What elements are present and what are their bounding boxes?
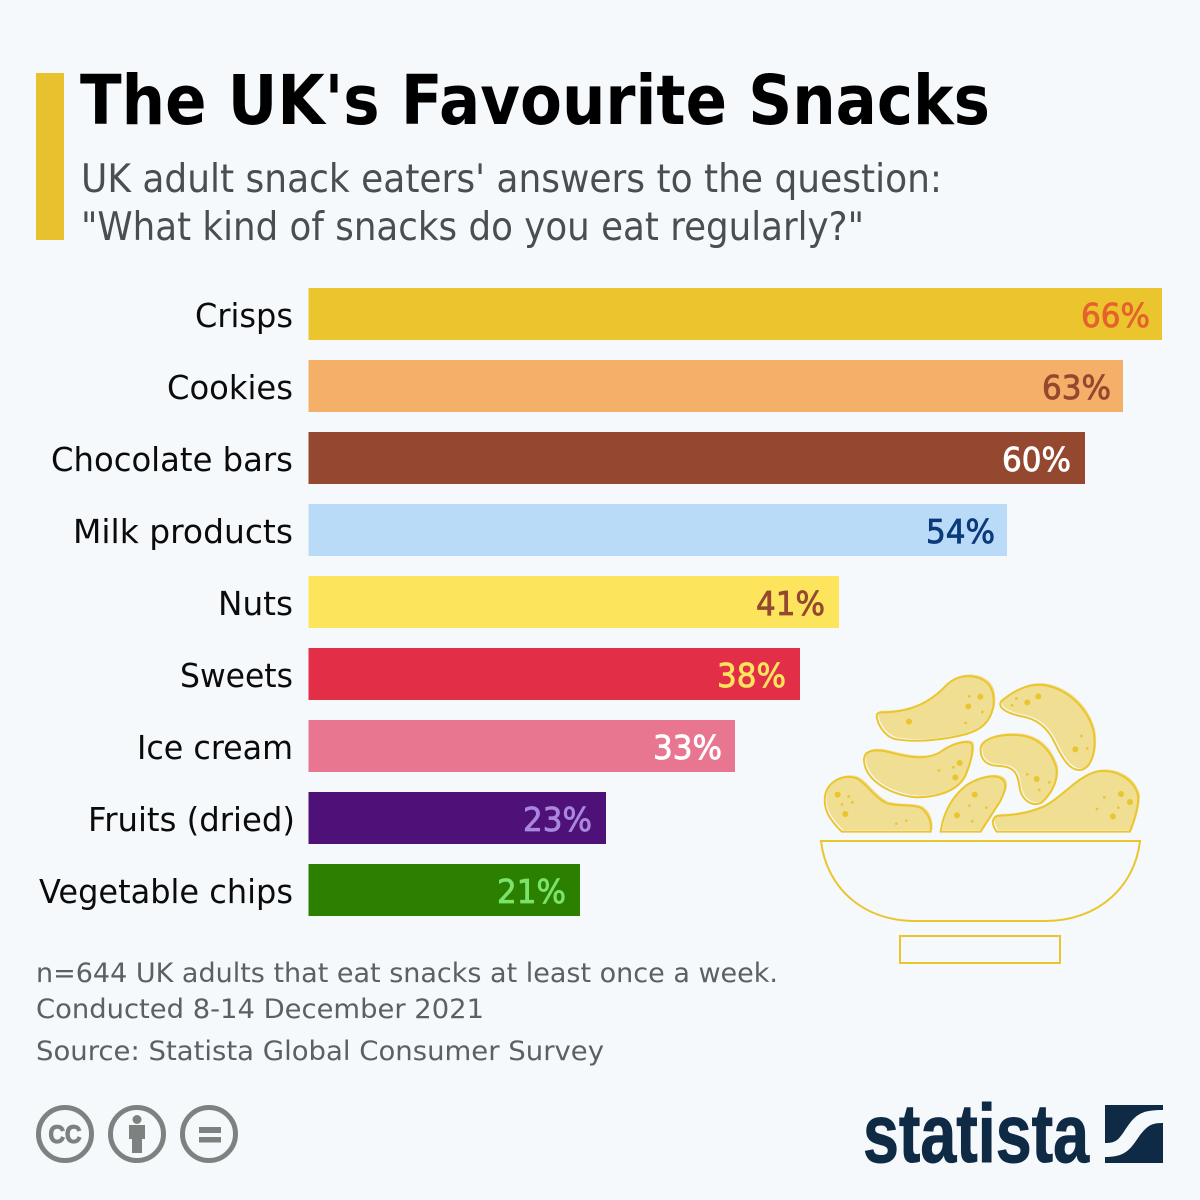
subtitle [81,157,942,250]
icon: bowl of crisps [821,674,1140,963]
footnote: n=644 UK adults that eat snacks at least once a week. [36,958,778,989]
icon: cc [38,1108,92,1160]
bar: Crisps 66% [195,288,1162,340]
bar: Cookies 63% [167,360,1123,412]
bar: Sweets 38%: 38% [717,656,786,695]
bar chart [39,288,1162,916]
logo: statista: statista [863,1087,1090,1180]
title: The UK's Favourite Snacks [80,61,990,141]
bar: Vegetable chips 21%: Vegetable chips [39,872,293,911]
accent bar [36,73,64,240]
icon: attribution [110,1108,164,1160]
bar: Crisps 66%: 66% [1081,296,1150,335]
bar: Cookies 63%: Cookies [167,368,293,407]
icon: cc: CC [48,1121,82,1149]
bar: Vegetable chips 21% [39,864,580,916]
bar: Vegetable chips 21%: 21% [497,872,566,911]
icon: statista mark [1105,1105,1163,1163]
bar: Chocolate bars 60%: Chocolate bars [51,440,293,479]
bar: Chocolate bars 60% [51,432,1085,484]
bar: Cookies 63%: 63% [1042,368,1111,407]
subtitle: UK adult snack eaters' answers to the question: [81,157,942,202]
footnote [36,958,778,1067]
bar: Crisps 66%: Crisps [195,296,293,335]
bowl [821,841,1140,921]
bar: Ice cream 33%: 33% [653,728,722,767]
bar: Fruits (dried) 23%: Fruits (dried) [88,800,295,839]
bar: Fruits (dried) 23%: 23% [523,800,592,839]
bar: Ice cream 33%: Ice cream [137,728,293,767]
bar: Milk products 54%: 54% [926,512,995,551]
icon: no derivatives [182,1108,236,1160]
bar: Sweets 38% [180,648,800,700]
bar: Nuts 41%: Nuts [218,584,293,623]
bar: Nuts 41%: 41% [756,584,825,623]
subtitle: "What kind of snacks do you eat regularly?" [81,205,864,250]
bar: Chocolate bars 60%: 60% [1002,440,1071,479]
bowl base [900,936,1060,963]
crisps [825,674,1140,832]
bar: Nuts 41% [218,576,839,628]
icon: creative commons licence [38,1108,236,1160]
bar: Ice cream 33% [137,720,735,772]
bar: Fruits (dried) 23% [88,792,606,844]
footnote: Conducted 8-14 December 2021 [36,994,484,1025]
bar: Milk products 54%: Milk products [73,512,293,551]
footnote: Source: Statista Global Consumer Survey [36,1036,604,1067]
bar: Sweets 38%: Sweets [180,656,293,695]
bar: Milk products 54% [73,504,1007,556]
